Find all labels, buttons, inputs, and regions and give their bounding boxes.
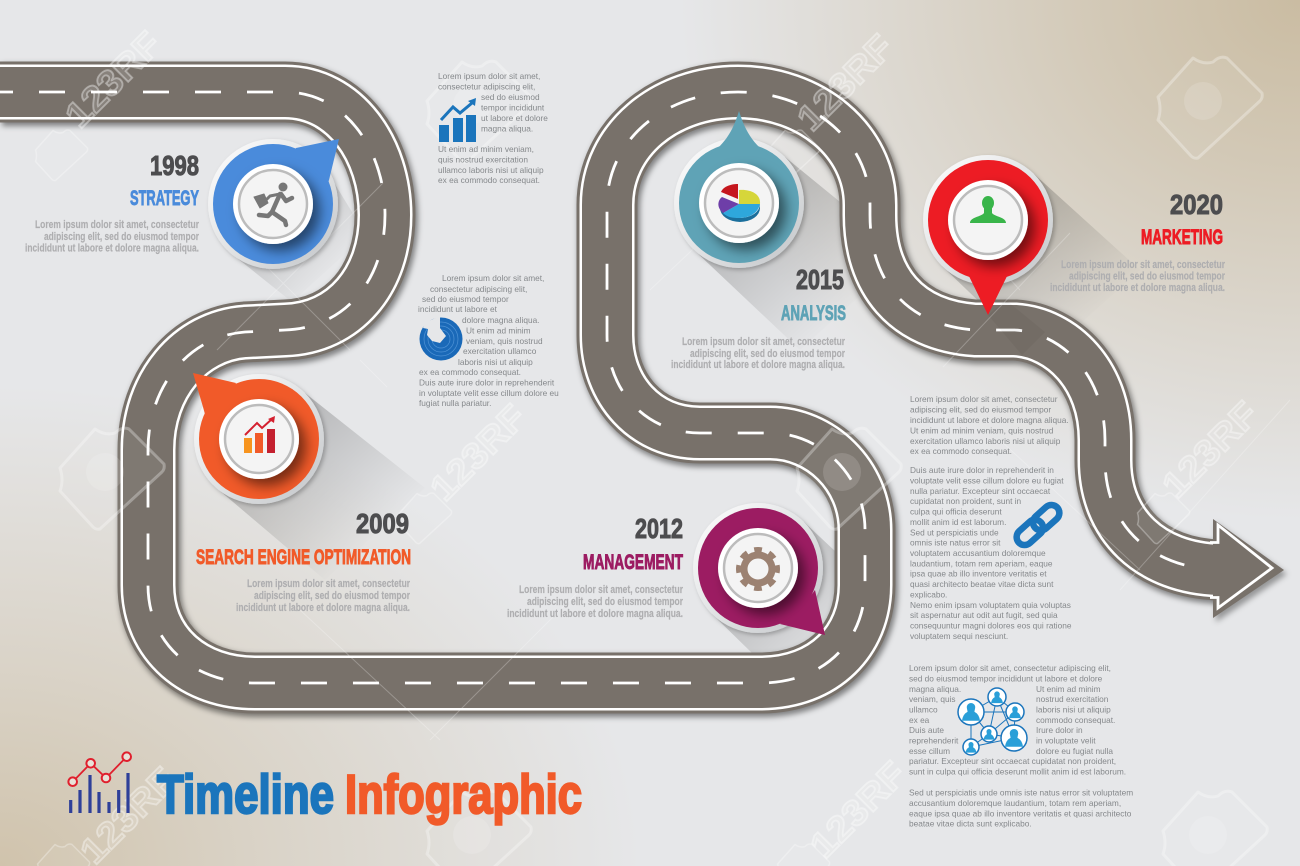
text block: right lower: sed do eiusmod tempor incididunt ut labore et dolore xyxy=(909,674,1103,684)
text block: middle centre: sed do eiusmod tempor xyxy=(422,294,509,304)
text block: top centre: quis nostrud exercitation xyxy=(438,154,528,164)
watermarks: 123RF xyxy=(789,26,901,139)
label: 1998: adipiscing elit, sed do eiusmod tempor xyxy=(44,231,200,243)
text block: right lower xyxy=(909,663,1133,828)
text block: middle centre: Duis aute irure dolor in reprehenderit xyxy=(419,378,555,388)
label: 1998: incididunt ut labore et dolore magna aliqua. xyxy=(25,242,199,254)
text block: right upper: Sed ut perspiciatis unde xyxy=(910,528,999,538)
text block: right upper: Nemo enim ipsam voluptatem quia voluptas xyxy=(910,600,1071,610)
text block: middle centre: incididunt ut labore et xyxy=(418,304,498,314)
text block: top centre: ex ea commodo consequat. xyxy=(438,175,540,185)
watermarks: 123RF xyxy=(1154,393,1266,506)
text block: right upper: consequuntur magni dolores eos qui ratione xyxy=(910,620,1072,630)
text block: top centre: ut labore et dolore xyxy=(481,113,548,123)
label: 2009: adipiscing elit, sed do eiusmod tempor xyxy=(254,590,411,602)
text block: right lower: Irure dolor in xyxy=(1036,725,1083,735)
text block: right lower: Duis aute xyxy=(909,725,944,735)
label: 2015: adipiscing elit, sed do eiusmod tempor xyxy=(690,348,846,360)
text block: right upper: ipsa quae ab illo inventore veritatis et xyxy=(910,568,1047,578)
text block: right lower: veniam, quis xyxy=(909,694,956,704)
label: 2015: incididunt ut labore et dolore magna aliqua. xyxy=(671,359,845,371)
icon: person xyxy=(970,196,1006,223)
label: 2012: Lorem ipsum dolor sit amet, consectetur xyxy=(519,584,684,596)
label: 2009 xyxy=(196,508,411,614)
label: 2015: 2015 xyxy=(796,264,844,295)
text block: right lower: nostrud exercitation xyxy=(1036,694,1109,704)
text block: right lower: ullamco xyxy=(909,704,938,714)
text block: right upper: Duis aute irure dolor in reprehenderit in xyxy=(910,465,1054,475)
text block: middle centre: consectetur adipiscing elit, xyxy=(430,284,527,294)
text block: right lower: esse cillum xyxy=(909,746,950,756)
pin: 2012 management xyxy=(693,503,825,635)
title: Timeline xyxy=(157,763,334,825)
text block: right upper xyxy=(910,394,1072,641)
label: 2012: MANAGEMENT xyxy=(583,551,683,574)
text block: right upper: omnis iste natus error sit xyxy=(910,538,1001,548)
label: 2012: incididunt ut labore et dolore magna aliqua. xyxy=(507,608,683,620)
label: 1998: Lorem ipsum dolor sit amet, consectetur xyxy=(35,219,200,231)
text block: right upper: culpa qui officia deserunt xyxy=(910,506,1002,516)
pin: 2009 search engine optimization xyxy=(193,373,324,504)
title xyxy=(157,763,582,825)
text block: middle centre: in voluptate velit esse cillum dolore eu xyxy=(419,388,559,398)
label: 2009: 2009 xyxy=(356,508,409,539)
label: 2009: incididunt ut labore et dolore magna aliqua. xyxy=(236,602,410,614)
text block: right lower: magna aliqua. xyxy=(909,684,961,694)
label: 2012: adipiscing elit, sed do eiusmod tempor xyxy=(527,596,684,608)
icon: blue bar chart xyxy=(439,98,476,142)
text block: right upper: Ut enim ad minim veniam, quis nostrud xyxy=(910,426,1054,436)
winding road xyxy=(0,92,1287,686)
text block: right lower: pariatur. Excepteur sint occaecat cupidatat non proident, xyxy=(909,756,1116,766)
text block: right upper: sit aspernatur aut odit aut fugit, sed quia xyxy=(910,610,1058,620)
label: 2015: Lorem ipsum dolor sit amet, consectetur xyxy=(682,336,846,348)
text block: right upper: Lorem ipsum dolor sit amet, consectetur xyxy=(910,394,1058,404)
text block: right upper: voluptate velit esse cillum dolore eu fugiat xyxy=(910,476,1064,486)
label: 1998: STRATEGY xyxy=(130,187,199,210)
label: 2015 xyxy=(671,264,846,371)
icon: title chart xyxy=(68,752,131,813)
text block: right lower: Ut enim ad minim xyxy=(1036,684,1101,694)
text block: right upper: mollit anim id est laborum. xyxy=(910,517,1006,527)
text block: middle centre: Lorem ipsum dolor sit amet, xyxy=(442,273,544,283)
label: 2020: incididunt ut labore et dolore magna aliqua. xyxy=(1050,282,1225,294)
watermarks: 123RF xyxy=(57,23,169,136)
text block: right lower: eaque ipsa quae ab illo inventore veritatis et quasi architecto xyxy=(909,808,1132,818)
text block: middle centre: ex ea commodo consequat. xyxy=(419,367,521,377)
arrow head xyxy=(1210,519,1284,618)
label: 2015: ANALYSIS xyxy=(781,302,846,325)
text block: middle centre xyxy=(418,273,559,408)
icon: rising bars xyxy=(244,416,275,453)
pin: 2015 analysis xyxy=(674,111,804,268)
text block: right lower: commodo consequat. xyxy=(1036,715,1115,725)
text block: right upper: exercitation ullamco laboris nisi ut aliquip xyxy=(910,436,1061,446)
watermarks: 123RF xyxy=(422,396,534,509)
text block: right upper: nulla pariatur. Excepteur sint occaecat xyxy=(910,486,1051,496)
icon: people network xyxy=(958,688,1027,755)
text block: right upper: explicabo. xyxy=(910,590,947,600)
text block: right upper: quasi architecto beatae vitae dicta sunt xyxy=(910,579,1054,589)
title: Infographic xyxy=(345,763,582,825)
text block: top centre: tempor incididunt xyxy=(481,102,545,112)
icon: gear xyxy=(739,550,777,588)
label: 2020: adipiscing elit, sed do eiusmod tempor xyxy=(1069,270,1226,282)
label: 2009: Lorem ipsum dolor sit amet, consectetur xyxy=(247,578,411,590)
text block: right upper: ex ea commodo consequat. xyxy=(910,446,1012,456)
text block: top centre: ullamco laboris nisi ut aliquip xyxy=(438,165,544,175)
text block: right lower: accusantium doloremque laudantium, totam rem aperiam, xyxy=(909,798,1121,808)
text block: right lower: beatae vitae dicta sunt explicabo. xyxy=(909,818,1032,828)
label: 2020: MARKETING xyxy=(1141,226,1223,249)
text block: right upper: incididunt ut labore et dolore magna aliqua. xyxy=(910,415,1069,425)
icon: blue donut chart xyxy=(420,316,462,360)
text block: right lower: reprehenderit xyxy=(909,736,959,746)
text block: top centre: consectetur adipiscing elit, xyxy=(438,82,535,92)
pin: 1998 strategy xyxy=(208,139,339,269)
text block: right lower: ex ea xyxy=(909,715,930,725)
text block: top centre xyxy=(438,71,548,185)
text block: right lower: in voluptate velit xyxy=(1036,736,1096,746)
label: 2009: SEARCH ENGINE OPTIMIZATION xyxy=(196,546,411,569)
text block: right upper: adipiscing elit, sed do eiusmod tempor xyxy=(910,404,1051,414)
text block: top centre: sed do eiusmod xyxy=(481,92,540,102)
label: 2020: Lorem ipsum dolor sit amet, consectetur xyxy=(1061,259,1226,271)
text block: right upper: cupidatat non proident, sunt in xyxy=(910,496,1022,506)
label: 1998 xyxy=(25,150,200,254)
watermarks: 123RF xyxy=(802,753,914,866)
icon: running man xyxy=(254,182,292,225)
text block: right upper: laudantium, totam rem aperiam, eaque xyxy=(910,558,1053,568)
text block: right lower: dolore eu fugiat nulla xyxy=(1036,746,1113,756)
text block: middle centre: Ut enim ad minim xyxy=(466,326,531,336)
icon: chain link xyxy=(1013,502,1063,548)
long shadows of pins xyxy=(213,157,1140,690)
label: 2012: 2012 xyxy=(635,513,683,544)
text block: middle centre: dolore magna aliqua. xyxy=(462,315,540,325)
text block: right lower: sunt in culpa qui officia deserunt mollit anim id est laborum. xyxy=(909,766,1126,776)
text block: middle centre: veniam, quis nostrud xyxy=(466,336,543,346)
text block: right lower: Lorem ipsum dolor sit amet, consectetur adipiscing elit, xyxy=(909,663,1111,673)
label: 2012 xyxy=(507,513,684,620)
label: 2020 xyxy=(1050,189,1226,294)
text block: top centre: Lorem ipsum dolor sit amet, xyxy=(438,71,540,81)
text block: right lower: Sed ut perspiciatis unde omnis iste natus error sit voluptatem xyxy=(909,788,1133,798)
text block: top centre: Ut enim ad minim veniam, xyxy=(438,144,534,154)
text block: right upper: voluptatem sequi nesciunt. xyxy=(910,631,1008,641)
text block: right lower: laboris nisi ut aliquip xyxy=(1036,704,1111,714)
pin: 2020 marketing xyxy=(923,155,1053,315)
text block: right upper: voluptatem accusantium doloremque xyxy=(910,548,1046,558)
label: 1998: 1998 xyxy=(150,150,199,181)
text block: middle centre: laboris nisi ut aliquip xyxy=(458,357,533,367)
label: 2020: 2020 xyxy=(1170,189,1223,220)
text block: middle centre: exercitation ullamco xyxy=(463,346,537,356)
icon: 3d pie chart xyxy=(718,184,760,222)
text block: top centre: magna aliqua. xyxy=(481,124,533,134)
text block: middle centre: fugiat nulla pariatur. xyxy=(419,398,491,408)
